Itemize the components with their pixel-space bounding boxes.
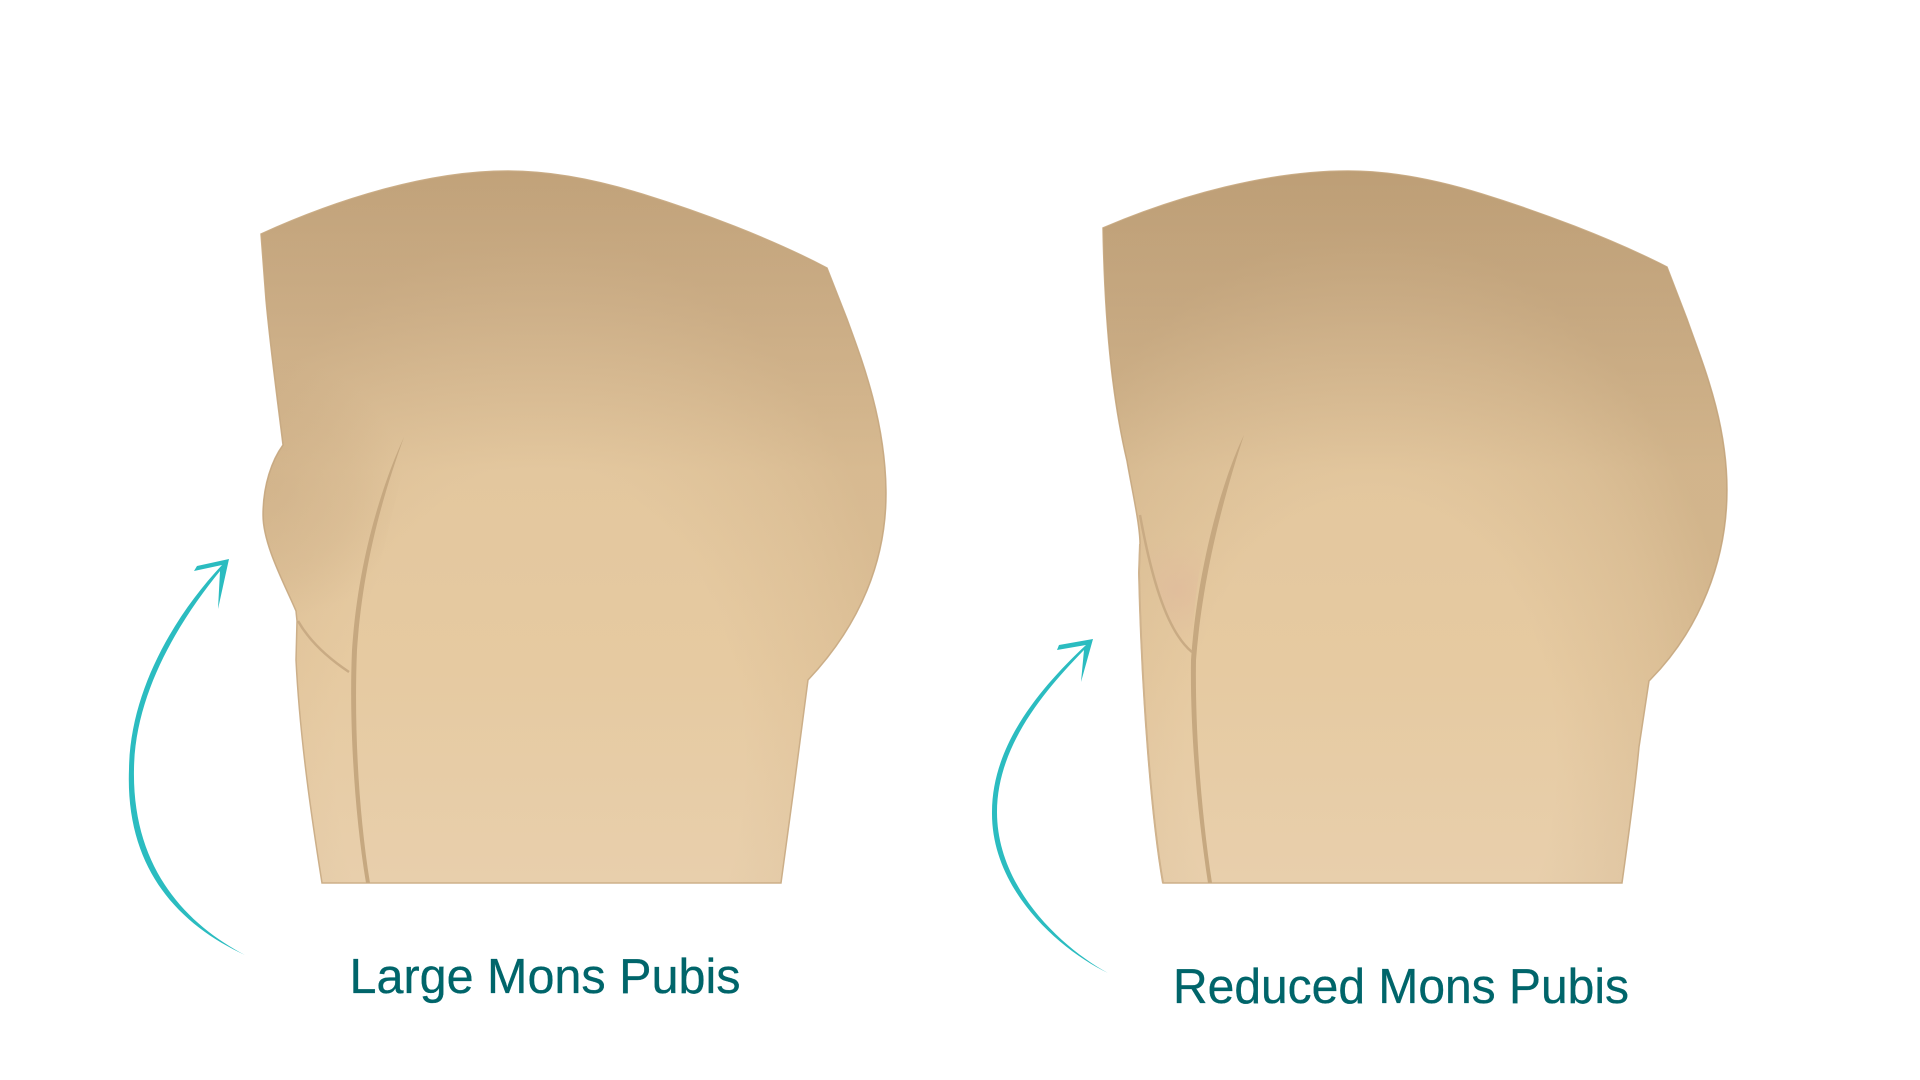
crease: inner thigh line bbox=[1191, 435, 1244, 883]
panel: large mons pubis bbox=[129, 171, 886, 1004]
figure: body with large mons bbox=[261, 171, 886, 883]
label: large mons pubis: Large Mons Pubis bbox=[350, 950, 740, 1004]
label: reduced mons pubis: Reduced Mons Pubis bbox=[1173, 960, 1629, 1014]
crease: under mons line bbox=[298, 621, 349, 672]
arrow: large mons pubis bbox=[129, 559, 245, 955]
crease: inner thigh line bbox=[351, 437, 404, 883]
figure: body with reduced mons bbox=[1103, 171, 1727, 883]
crease: thigh edge bbox=[1139, 544, 1163, 883]
arrow: reduced mons pubis bbox=[992, 639, 1108, 973]
crease: under mons line bbox=[1140, 515, 1192, 652]
panel: reduced mons pubis bbox=[992, 171, 1727, 1014]
